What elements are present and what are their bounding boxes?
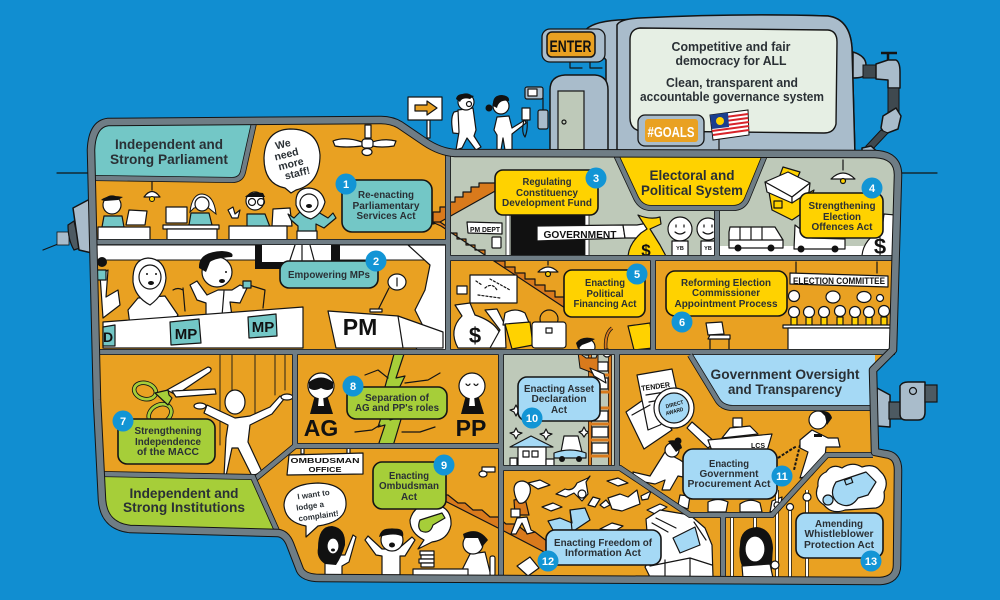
headscarf mp — [128, 258, 185, 325]
tender papers — [626, 369, 681, 449]
label 11: enacting government procurement act — [683, 449, 792, 499]
pm dept sign — [467, 222, 502, 234]
goals sign — [638, 115, 704, 146]
heading fill: institutions — [105, 477, 273, 529]
label 13: amending whistleblower protection act: Whistleblower — [804, 528, 874, 540]
label 4: strengthening election offences act — [800, 178, 883, 238]
speech bubble: more staff: staff! — [284, 165, 311, 183]
woman mp at left — [96, 257, 120, 318]
label 11: enacting government procurement act: Procurement Act — [688, 478, 771, 490]
running woman — [633, 438, 692, 490]
bus — [729, 227, 783, 252]
label 1: re-enacting parliamentary services act — [336, 174, 432, 232]
cracks — [355, 370, 440, 432]
faucet — [853, 52, 901, 156]
lightning bolt — [378, 354, 405, 446]
label 10: enacting asset declaration act: Declaration — [532, 393, 586, 405]
ballot box — [765, 167, 814, 220]
illustration: lower parliament — [96, 245, 450, 352]
mps desk: MP — [175, 326, 197, 343]
door — [558, 91, 584, 154]
door tower — [550, 75, 608, 156]
complaint bubble: I want to — [297, 488, 330, 501]
goal text: democracy for ALL — [676, 54, 787, 68]
office sign: OFFICE — [308, 465, 342, 474]
mps desk — [103, 307, 303, 348]
puppet strings — [220, 355, 285, 445]
person: backpack man — [452, 94, 481, 150]
complaint bubble — [284, 483, 346, 537]
label 10: enacting asset declaration act: Act — [551, 404, 567, 416]
lcs ship: LCS — [751, 443, 765, 450]
label 3: regulating constituency development fund — [495, 168, 606, 215]
staff 4 in headscarf — [288, 188, 336, 243]
ag figure: AG — [304, 415, 338, 441]
gold stack left — [505, 322, 533, 349]
label 12: enacting freedom of information act — [538, 530, 661, 572]
complaint bubble: lodge a — [296, 500, 325, 513]
framed painting — [470, 275, 517, 303]
heading borders — [94, 123, 874, 533]
heading: independent and strong parliament: Independent and — [115, 136, 223, 152]
label 7: strengthening independence of the macc — [112, 410, 215, 464]
pp figure: PP — [456, 415, 486, 441]
van — [794, 225, 845, 252]
label 3: regulating constituency development fund: Constituency — [516, 187, 578, 199]
label 3: regulating constituency development fund: Regulating — [522, 176, 572, 188]
money bag white: $ — [874, 234, 886, 259]
illustration: political financing — [454, 260, 653, 350]
heading: independent and strong institutions — [123, 485, 245, 515]
ballot box: x — [787, 172, 792, 181]
jailed woman — [739, 527, 779, 578]
ground — [720, 246, 864, 255]
machine main front panel — [617, 15, 855, 156]
briefcase — [532, 310, 566, 348]
label 10: enacting asset declaration act: 10 — [526, 413, 538, 425]
label 5: enacting political financing act — [564, 264, 648, 317]
speaker figure at right — [408, 246, 445, 349]
building interior — [90, 120, 900, 580]
desk and staff 2 — [163, 194, 219, 243]
pm mic — [370, 274, 406, 312]
magnifying glass: AWARD — [665, 407, 684, 417]
label 2: empowering mps: Empowering MPs — [288, 269, 370, 281]
label 3: regulating constituency development fund: 3 — [593, 173, 599, 185]
label 12: enacting freedom of information act: Information Act — [565, 547, 641, 559]
flying blue book — [548, 508, 590, 530]
whistle — [823, 472, 876, 506]
label 1: re-enacting parliamentary services act: Services Act — [356, 210, 416, 222]
money bags — [454, 303, 530, 348]
chained man — [800, 411, 840, 478]
sparkles — [510, 405, 522, 416]
label 1: re-enacting parliamentary services act: 1 — [343, 179, 349, 191]
mps desk: D — [103, 329, 113, 345]
label 13: amending whistleblower protection act: Protection Act — [804, 539, 874, 551]
label 5: enacting political financing act: 5 — [634, 269, 640, 281]
label 6: reforming election commissioner appointment process: 6 — [679, 317, 685, 329]
committee figures — [788, 306, 890, 328]
label 12: enacting freedom of information act: 12 — [542, 556, 554, 568]
label 11: enacting government procurement act: 11 — [776, 471, 788, 483]
speech bubble: more staff: We — [274, 137, 292, 152]
label 1: re-enacting parliamentary services act: Parliamentary — [352, 200, 420, 212]
label 13: amending whistleblower protection act — [796, 513, 883, 572]
label 9: enacting ombudsman act: 9 — [441, 460, 447, 472]
speech bubble: more staff — [264, 129, 320, 193]
stairs: upper flight — [432, 183, 565, 308]
woman complaining — [318, 526, 356, 575]
enter sign: ENTER — [550, 37, 592, 56]
label 4: strengthening election offences act: 4 — [869, 183, 876, 195]
mps desk: MP — [252, 319, 274, 336]
ceiling lamp — [144, 182, 160, 202]
room: constituency fund and election offences — [451, 156, 894, 255]
heading fill: oversight — [688, 352, 875, 408]
heading: independent and strong parliament: Strong Parliament — [110, 151, 228, 167]
money bags: $ — [469, 323, 481, 348]
label 9: enacting ombudsman act: Act — [401, 491, 417, 503]
label 9: enacting ombudsman act: Enacting — [389, 470, 429, 482]
magnifying glass: DIRECT — [665, 400, 685, 410]
illustration: freedom of information — [511, 476, 713, 577]
office sign — [287, 447, 363, 475]
child complaining — [365, 529, 415, 575]
committee sign: ELECTION COMMITTEE — [793, 276, 885, 286]
label 6: reforming election commissioner appointment process: Commissioner — [692, 287, 760, 299]
chain — [778, 445, 800, 470]
pipe: left — [43, 173, 92, 253]
label 12: enacting freedom of information act: Enacting Freedom of — [554, 537, 652, 549]
heading: government oversight and transparency: and Transparency — [728, 381, 842, 397]
label 10: enacting asset declaration act — [518, 377, 600, 428]
ladder — [588, 352, 612, 468]
flying book — [600, 490, 651, 511]
flying papers — [517, 478, 667, 576]
wall lamp — [479, 467, 495, 477]
pm desk — [328, 311, 443, 348]
illustration: ag and pp — [304, 354, 486, 446]
camera — [525, 87, 548, 129]
machine body — [584, 15, 855, 156]
cloud — [816, 464, 886, 512]
label 13: amending whistleblower protection act: 13 — [865, 556, 877, 568]
door plate — [492, 237, 501, 248]
speech bubbles — [788, 290, 884, 303]
money bag yellow: $ — [641, 241, 651, 260]
tender papers: TENDER — [641, 380, 671, 393]
desk and staff 3 — [228, 192, 292, 243]
label 8: separation of ag and pp's roles: AG and PP's roles — [355, 402, 439, 414]
heading: electoral and political system: Electoral and — [650, 167, 734, 183]
label 6: reforming election commissioner appointment process: Appointment Process — [674, 298, 778, 310]
goal text: accountable governance system — [640, 90, 824, 104]
walls: building structure — [91, 120, 898, 581]
label 1: re-enacting parliamentary services act: Re-enacting — [358, 189, 414, 201]
woman on stairs — [511, 481, 535, 534]
machine: goals building — [542, 15, 901, 156]
committee sign — [790, 262, 888, 287]
label 7: strengthening independence of the macc: Strengthening — [134, 425, 202, 437]
speech bubble: more staff: need — [273, 146, 300, 163]
jail bars — [732, 490, 811, 580]
government arm: GOVERNMENT — [544, 229, 617, 241]
yb figure one — [668, 217, 692, 259]
house — [510, 436, 554, 467]
puppet — [194, 390, 293, 476]
heading: electoral and political system: Political System — [641, 182, 743, 198]
label 4: strengthening election offences act: Offences Act — [812, 221, 873, 233]
yb figure two: YB — [704, 246, 712, 252]
label 11: enacting government procurement act: Government — [700, 468, 759, 480]
label 2: empowering mps — [280, 250, 386, 288]
label 3: regulating constituency development fund: Development Fund — [502, 197, 592, 209]
label 6: reforming election commissioner appointment process: Reforming Election — [681, 277, 771, 289]
label 10: enacting asset declaration act: Enacting Asset — [524, 383, 594, 395]
lamp — [831, 160, 855, 184]
black doorway — [511, 215, 585, 258]
label 9: enacting ombudsman act: Ombudsman — [379, 480, 439, 492]
building base — [91, 120, 898, 581]
illustration: procurement — [626, 369, 840, 512]
signpost — [408, 97, 442, 138]
committee table — [783, 325, 895, 352]
illustration: election offences — [720, 160, 898, 259]
officer at desk — [413, 531, 495, 580]
heading: independent and strong institutions: Independent and — [130, 485, 238, 501]
sparkles lower — [510, 427, 589, 440]
lamp — [538, 260, 558, 276]
label 7: strengthening independence of the macc: 7 — [120, 416, 126, 428]
illustration: macc puppet and scissors — [132, 355, 293, 476]
illustration: constituency fund — [466, 214, 714, 255]
yb figure two — [696, 217, 714, 255]
goals sign: #GOALS — [648, 124, 694, 141]
goal text — [640, 40, 824, 104]
complaint bubble: complaint! — [298, 509, 339, 523]
illustration: election committee — [706, 262, 895, 352]
yb figure one: YB — [676, 246, 684, 252]
window — [255, 245, 340, 269]
money bag yellow — [628, 214, 666, 255]
magnifying glass — [654, 388, 715, 448]
person: journalist woman — [486, 95, 530, 150]
climbing person — [576, 328, 612, 383]
label 5: enacting political financing act: Political — [586, 288, 624, 300]
label 8: separation of ag and pp's roles: 8 — [350, 381, 356, 393]
illustration: asset declaration — [510, 328, 612, 468]
label 4: strengthening election offences act: Election — [823, 211, 861, 223]
goal text: Clean, transparent and — [666, 76, 798, 90]
stones — [678, 495, 782, 512]
heading: electoral and political system — [641, 167, 743, 198]
label 9: enacting ombudsman act — [373, 454, 454, 509]
outer wall — [91, 120, 898, 581]
enter sign — [542, 29, 605, 68]
ag figure — [304, 373, 338, 441]
car — [554, 436, 586, 462]
flying binder — [556, 476, 590, 501]
pm dept sign: PM DEPT — [470, 225, 500, 234]
heading: government oversight and transparency — [710, 366, 860, 397]
small frame — [457, 286, 467, 294]
label 11: enacting government procurement act: Enacting — [709, 458, 749, 470]
government arm — [537, 223, 650, 241]
label 8: separation of ag and pp's roles: Separation of — [365, 392, 429, 404]
interior walls dark outline — [94, 155, 897, 580]
illustration: whistleblower — [732, 464, 886, 580]
door frame — [506, 215, 589, 258]
stairs: lower flight — [444, 495, 548, 554]
pm desk: PM — [343, 314, 377, 340]
heading: independent and strong institutions: Strong Institutions — [123, 499, 245, 515]
label 7: strengthening independence of the macc: Independence — [135, 436, 201, 448]
label 5: enacting political financing act: Financing Act — [574, 298, 637, 310]
books — [419, 551, 434, 567]
label 7: strengthening independence of the macc: of the MACC — [137, 446, 199, 458]
ceiling fan — [333, 125, 396, 156]
chair — [706, 322, 730, 351]
label 2: empowering mps: 2 — [373, 256, 379, 268]
office sign: OMBUDSMAN — [290, 456, 360, 465]
heading: independent and strong parliament — [110, 136, 228, 167]
illustration: upper parliament — [98, 125, 396, 243]
heading: government oversight and transparency: Government Oversight — [710, 366, 860, 382]
overflowing trunk — [645, 510, 713, 577]
label 13: amending whistleblower protection act: Amending — [815, 518, 863, 530]
speech bubble: more staff: more — [277, 155, 305, 173]
scissors — [132, 367, 216, 428]
male mp in suit — [190, 251, 265, 318]
room: asset declaration — [504, 355, 614, 465]
screen — [630, 28, 837, 133]
label 6: reforming election commissioner appointment process — [666, 271, 787, 332]
money bag white — [862, 214, 895, 259]
whistle bubble — [410, 504, 451, 549]
gold stack right — [628, 323, 653, 350]
wall band — [96, 245, 446, 260]
heading fill: parliament — [95, 125, 250, 177]
desk and staff 1 — [98, 196, 150, 243]
lcs ship — [708, 418, 772, 451]
flag — [710, 110, 749, 151]
illustration: ombudsman office — [284, 447, 495, 580]
label 4: strengthening election offences act: Strengthening — [808, 200, 876, 212]
label 5: enacting political financing act: Enacting — [585, 277, 625, 289]
label 8: separation of ag and pp's roles — [342, 376, 447, 419]
heading fill: electoral — [620, 158, 760, 205]
pipe: right — [877, 173, 937, 427]
goal text: Competitive and fair — [672, 40, 791, 54]
pp figure — [456, 373, 486, 441]
